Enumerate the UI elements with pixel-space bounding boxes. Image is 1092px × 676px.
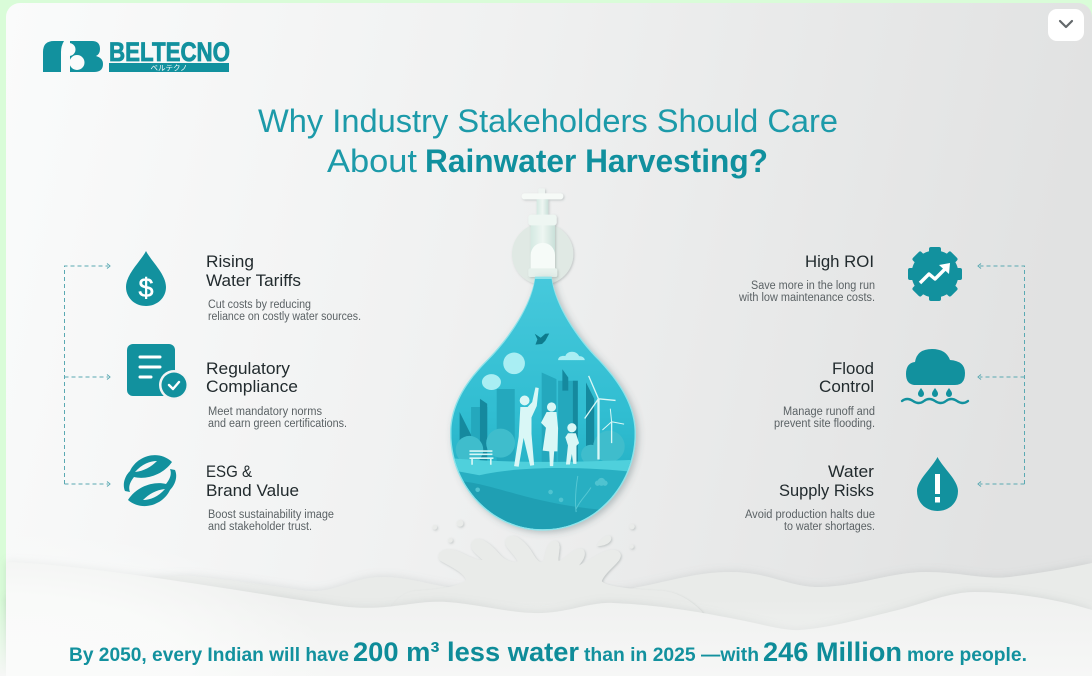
icon: dollar drop [126, 251, 166, 306]
item: High ROI [738, 247, 962, 304]
water drop [448, 276, 639, 532]
description: Manage runoff and [783, 406, 875, 418]
heading: Brand Value [206, 481, 299, 500]
connector: left dashed bracket [64, 264, 110, 486]
item: ESG and Brand Value [124, 455, 334, 533]
heading: High ROI [805, 252, 874, 271]
description: Avoid production halts due [745, 509, 875, 521]
heading: Flood [832, 359, 874, 378]
bottom statistic line: than in 2025 —with [584, 645, 759, 666]
item: Flood Control [774, 349, 968, 430]
icon: warning drop [917, 457, 958, 511]
logo symbol [43, 41, 103, 72]
logo wordmark: BELTECNO [109, 37, 230, 67]
bottom statistic line: 200 m³ less water [353, 637, 579, 667]
trees [456, 429, 625, 464]
flower and grass [475, 478, 608, 502]
bottom statistic line [69, 637, 1027, 667]
item: Water Supply Risks [745, 457, 958, 533]
wind turbines [585, 376, 624, 460]
logo: Beltecno [43, 37, 230, 72]
bottom statistic line: more people. [907, 645, 1027, 666]
splash droplets [432, 520, 635, 549]
icon: document check [127, 344, 189, 400]
description: Boost sustainability image [208, 509, 334, 521]
icon: gear with rising arrow [908, 247, 962, 301]
item: Rising Water Tariffs [126, 251, 361, 323]
family figures [514, 387, 579, 467]
heading: ESG & [206, 462, 253, 481]
description: Meet mandatory norms [208, 406, 322, 418]
description: prevent site flooding. [774, 418, 875, 430]
bottom statistic line: By 2050, every Indian will have [69, 645, 349, 666]
hills [454, 458, 631, 476]
icon: two leaves [124, 455, 176, 506]
bottom statistic line: 246 Million [763, 637, 902, 667]
title: About [327, 143, 417, 179]
logo bar [109, 63, 229, 72]
centre illustration: faucet and drop [448, 188, 639, 532]
description: Cut costs by reducing [208, 299, 311, 311]
faucet [512, 188, 573, 285]
title [258, 103, 838, 179]
item: Regulatory Compliance [127, 344, 347, 430]
title: Why Industry Stakeholders Should Care [258, 103, 838, 139]
logo katakana: ベルテクノ [150, 64, 188, 72]
heading: Supply Risks [779, 481, 874, 500]
icon: dollar drop: $ [138, 273, 154, 303]
dropdown button [1048, 9, 1084, 41]
description: and stakeholder trust. [208, 521, 312, 533]
description: and earn green certifications. [208, 418, 347, 430]
paper waves: lower layer [6, 562, 1092, 676]
connector: right dashed bracket [978, 264, 1024, 486]
paper waves: upper layer [6, 563, 1092, 676]
heading: Rising [206, 252, 254, 271]
buildings [460, 369, 594, 471]
heading: Water [828, 462, 874, 481]
icon: cloud rain and waves [902, 349, 968, 403]
description: to water shortages. [784, 521, 875, 533]
title: Rainwater Harvesting? [425, 143, 768, 179]
sun and clouds [482, 352, 585, 390]
bench [469, 451, 493, 465]
heading: Compliance [206, 377, 298, 396]
description: with low maintenance costs. [738, 292, 875, 304]
description: Save more in the long run [751, 280, 875, 292]
heading: Control [819, 377, 874, 396]
description: reliance on costly water sources. [208, 311, 361, 323]
splash [390, 520, 700, 630]
heading: Regulatory [206, 359, 291, 378]
butterfly [535, 333, 549, 345]
heading: Water Tariffs [206, 271, 301, 290]
